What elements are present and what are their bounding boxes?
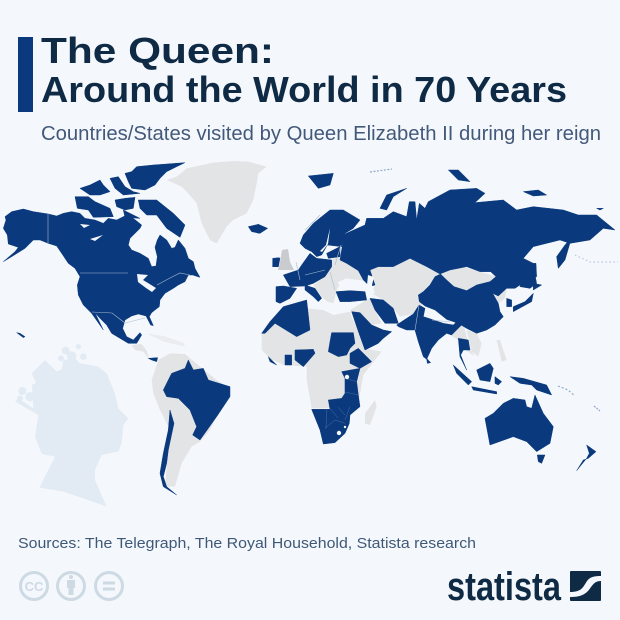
Eurasia grey: [313, 256, 507, 357]
world map: [3, 161, 618, 495]
small islands: [370, 169, 618, 411]
icon: no derivatives: [96, 572, 122, 600]
queen silhouette: [15, 344, 128, 507]
title: Around the World in 70 Years: [41, 69, 567, 110]
title accent bar: [18, 37, 33, 112]
icon: cc: CC: [25, 579, 44, 594]
subtitle: Countries/States visited by Queen Elizabeth II during her reign: [41, 123, 601, 145]
title: [41, 30, 567, 110]
statista logo: [447, 565, 601, 609]
title: The Queen:: [41, 30, 274, 71]
logo mark: [570, 571, 601, 601]
country borders: [48, 214, 450, 428]
Africa and Madagascar grey: [307, 308, 363, 340]
region: not visited (grey): [132, 161, 507, 487]
Africa, South-East Asia and Oceania: [268, 338, 596, 471]
Eurasia: [250, 170, 615, 359]
logo wordmark: statista: [447, 565, 562, 609]
Chile, Brazil and Venezuela coast: [148, 358, 230, 495]
region: visited (blue): [3, 163, 615, 495]
North America: [3, 163, 280, 343]
creative commons icons: [20, 572, 122, 600]
source line: Sources: The Telegraph, The Royal Household, Statista research: [18, 535, 476, 552]
lakes and inland seas: [80, 224, 375, 435]
icon: attribution person: [58, 572, 84, 600]
United Kingdom: [278, 249, 294, 270]
Central and South America grey: [132, 333, 230, 487]
Greenland: [167, 161, 267, 243]
